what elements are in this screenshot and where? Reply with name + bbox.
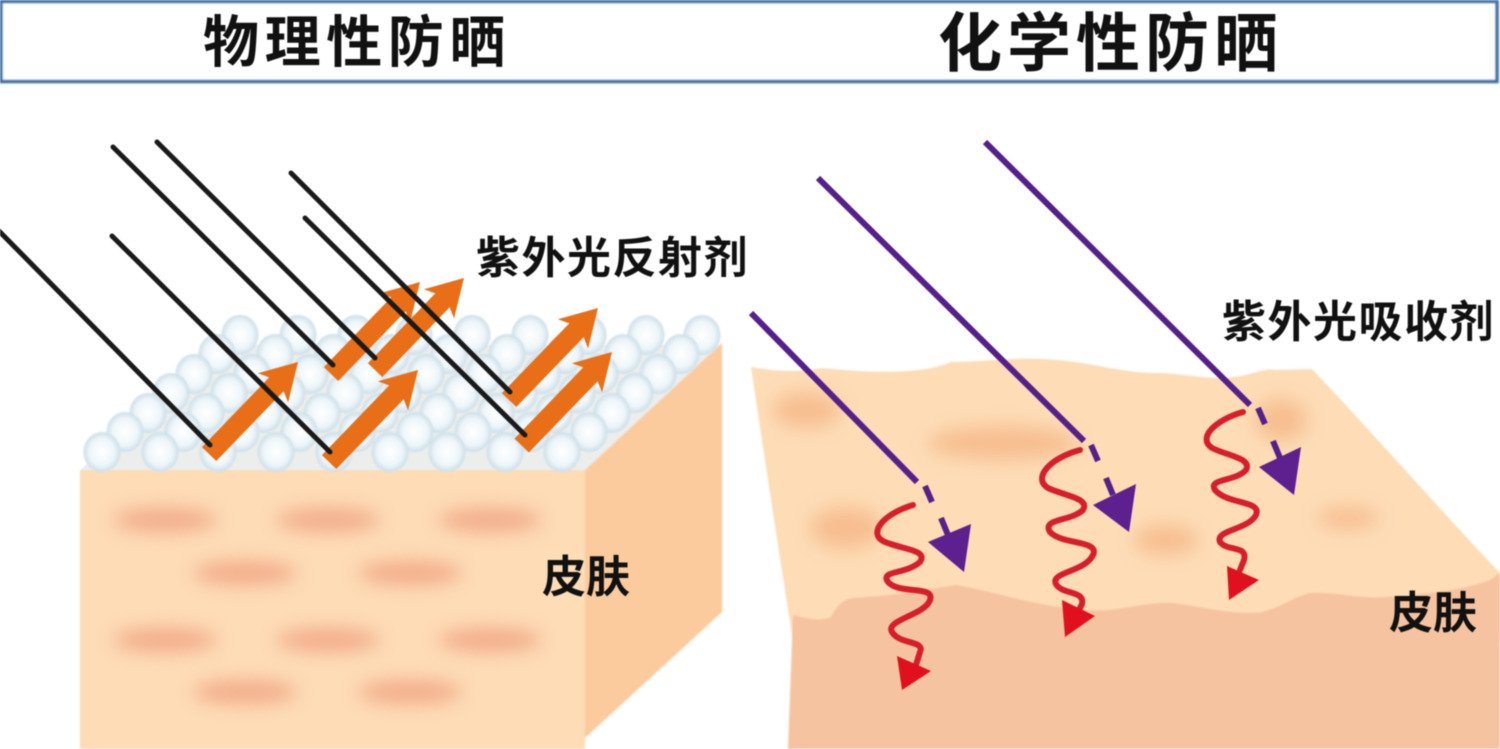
panel: physical sunscreen [0, 142, 749, 749]
heading: chemical sunscreen: 化学性防晒 [938, 8, 1283, 80]
heading: physical sunscreen: 物理性防晒 [203, 11, 511, 74]
label: UV absorber: 紫外光吸收剂 [1222, 298, 1495, 347]
skin spots [113, 508, 542, 704]
label: UV reflector: 紫外光反射剂 [476, 234, 749, 283]
label: skin: 皮肤 [1389, 589, 1477, 638]
reflective particles [84, 315, 720, 472]
skin spots [773, 392, 1378, 555]
skin block [80, 343, 722, 749]
UV rays with purple arrowheads [751, 142, 1301, 572]
lower skin layer [788, 573, 1500, 749]
reflected UV arrows [194, 263, 627, 477]
incoming UV rays [0, 142, 525, 452]
title bar [1, 2, 1497, 82]
panel: chemical sunscreen [751, 142, 1500, 749]
upper skin layer [751, 359, 1500, 640]
wavy red rays [877, 412, 1259, 690]
label: skin: 皮肤 [542, 553, 630, 602]
